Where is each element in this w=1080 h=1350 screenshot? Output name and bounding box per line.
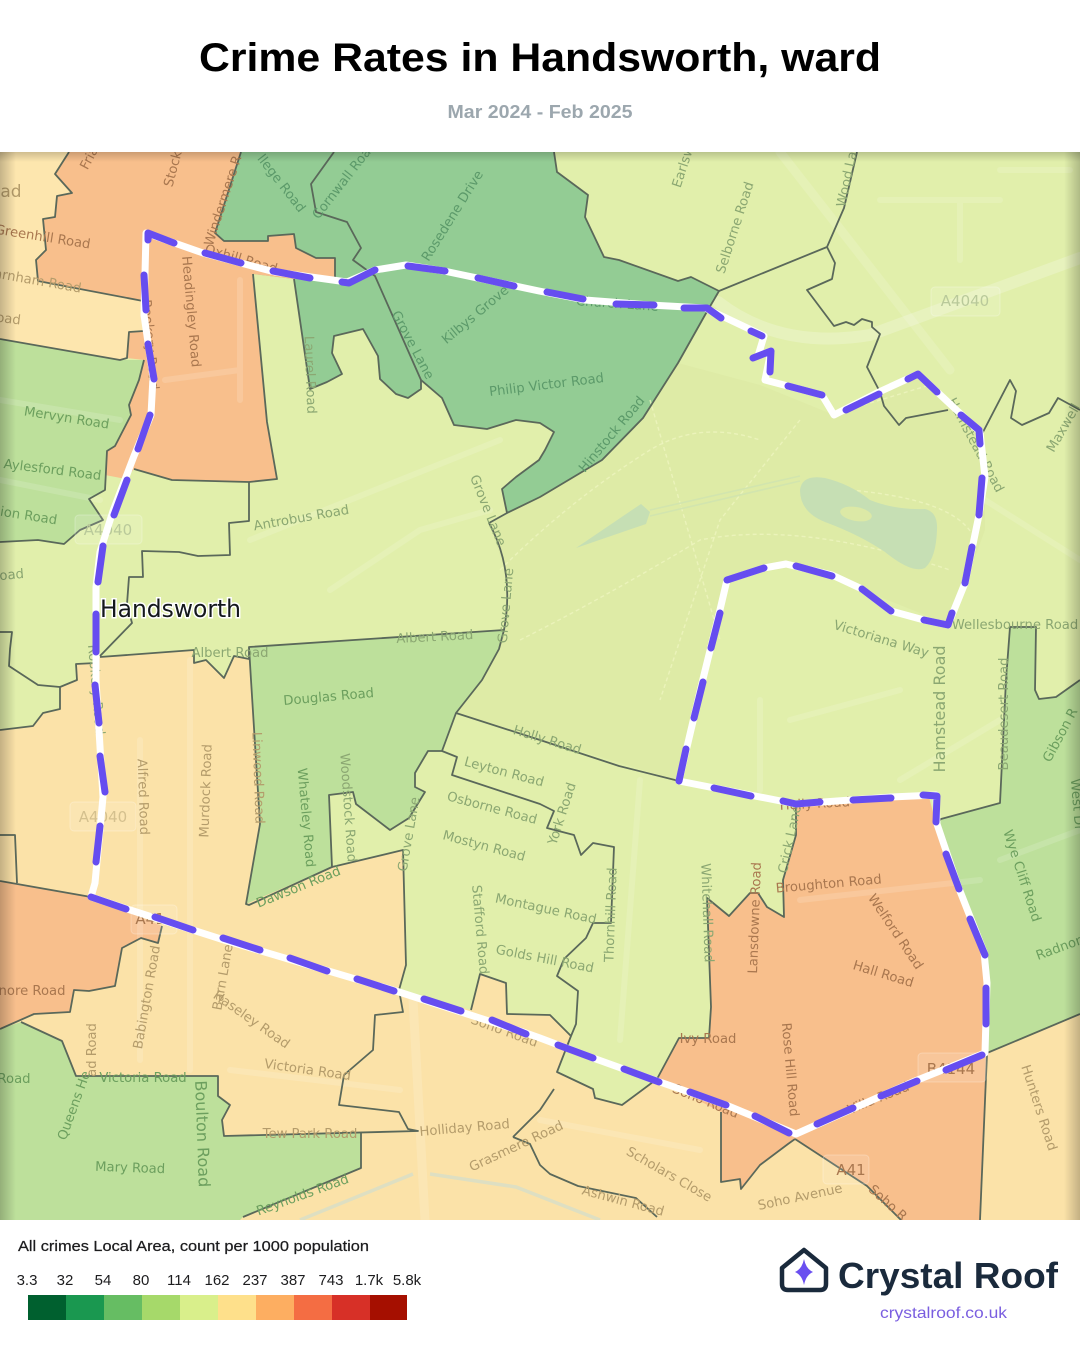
area: orange north-west	[36, 152, 335, 482]
title: Crime Rates in Handsworth, ward	[199, 36, 881, 80]
legend title: All crimes Local Area, count per 1000 population	[18, 1238, 369, 1255]
road labels: Woodstock Road	[336, 753, 359, 863]
road labels: Holly Road	[779, 795, 850, 814]
ward boundary: white line	[91, 233, 987, 1134]
website: crystalroof.co.uk	[880, 1305, 1008, 1322]
road labels: Lansdowne Road	[746, 862, 765, 974]
road labels: llege Road	[254, 152, 308, 216]
road labels: Rookery Road	[84, 644, 107, 735]
road labels: nore Road	[0, 984, 65, 999]
road labels: Rosedene Drive	[419, 168, 487, 264]
road labels: Boulton Road	[191, 1080, 214, 1188]
road labels: A41	[836, 1161, 866, 1179]
road labels: Osborne Road	[445, 789, 539, 828]
icon: house with star	[782, 1250, 826, 1290]
road labels: Douglas Road	[283, 686, 375, 709]
road labels: Leyton Road	[462, 755, 545, 790]
road labels: Victoria Road	[99, 1071, 187, 1086]
small lake	[576, 504, 650, 548]
road labels: Church Lane	[575, 294, 659, 315]
road labels: Wellesbourne Road	[952, 618, 1078, 633]
road labels: Grove Lane	[388, 309, 436, 382]
park area	[456, 363, 985, 781]
road labels: Grove Lane	[396, 796, 423, 873]
map edge vignette	[0, 152, 1080, 1220]
road labels: Soho R	[865, 1182, 910, 1224]
road labels: Selborne Road	[714, 180, 758, 276]
road labels: Tew Park Road	[262, 1127, 357, 1142]
road labels: Rose Hill Road	[778, 1022, 801, 1117]
road labels: Broughton Road	[775, 872, 882, 897]
road labels: Philip Victor Road	[488, 371, 605, 400]
area: medium green south-west	[0, 1022, 361, 1220]
road labels: Kilbys Grove	[439, 283, 512, 348]
road labels: Grove Lane	[466, 473, 508, 548]
map base: low crime areas	[0, 152, 1080, 1104]
road labels: Barn Lane	[210, 943, 237, 1012]
road labels: Laurel Road	[301, 336, 318, 414]
road labels: Wye Cliff Road	[999, 828, 1043, 924]
road labels: Fria	[78, 144, 102, 172]
area: medium green east	[936, 627, 1080, 1053]
legend values: 32	[57, 1272, 73, 1289]
road labels: Dawson Road	[254, 864, 343, 911]
legend values: 1.7k	[355, 1272, 384, 1289]
place label: Handsworth: Handsworth	[100, 595, 241, 623]
road labels: Ivy Road	[680, 1032, 736, 1047]
road labels: Whitehall Road	[697, 863, 716, 963]
road labels: Aylesford Road	[3, 457, 102, 484]
legend values: 80	[133, 1272, 149, 1289]
road labels: Mary Road	[95, 1160, 165, 1177]
area: orange west	[0, 881, 162, 1029]
road labels: Welford Road	[864, 892, 926, 973]
road labels: Mervyn Road	[23, 404, 110, 433]
legend values: 3.3	[17, 1272, 37, 1289]
road labels: ion Road	[0, 505, 58, 528]
road labels: Queens He	[55, 1069, 94, 1142]
legend values: 387	[280, 1272, 306, 1289]
road labels: Headingley Road	[178, 255, 203, 368]
lake	[800, 477, 937, 569]
road labels: Wood La	[834, 150, 861, 208]
road shields	[70, 287, 1000, 1184]
road labels: Hinstock Road	[576, 394, 648, 476]
road labels: A4040	[84, 521, 132, 539]
road labels: Stafford Road	[468, 884, 491, 975]
area: orange south-east	[657, 797, 987, 1220]
legend values: 5.8k	[393, 1272, 422, 1289]
legend values: 162	[204, 1272, 230, 1289]
road labels: Whateley Road	[294, 767, 317, 868]
road labels: York Road	[545, 781, 580, 848]
road labels: Grasmere Road	[467, 1118, 566, 1175]
road labels: Murdock Road	[197, 744, 216, 838]
road labels: Hunters Road	[1017, 1063, 1059, 1153]
boundary lines	[0, 152, 1080, 1220]
road labels: Thornhill Road	[602, 867, 621, 963]
road labels: Alfred Road	[134, 759, 151, 835]
road labels: Crick Lane	[776, 804, 805, 875]
road labels: Victoria Road	[263, 1057, 352, 1084]
logo	[782, 1250, 1059, 1322]
road labels: Victoriana Way	[832, 618, 931, 661]
road labels: Soho Avenue	[757, 1181, 844, 1214]
area: tan top left	[0, 152, 146, 360]
road labels: Montague Road	[494, 892, 598, 928]
road labels: A4040	[79, 808, 127, 826]
road labels: Villa Road	[846, 1080, 912, 1118]
ward boundary: purple dashes	[91, 233, 986, 1133]
road labels: Oxhill Road	[203, 242, 279, 277]
lake island	[840, 506, 872, 522]
road labels: Hamstead Road	[944, 396, 1006, 495]
road labels: Windermere R	[202, 154, 245, 248]
road labels: A4040	[941, 292, 989, 310]
road labels: Earlsw	[670, 144, 698, 190]
road labels: Hall Road	[851, 958, 915, 991]
road labels: Mostyn Road	[441, 828, 527, 865]
road labels: Albert Road	[396, 628, 474, 647]
road labels: Cornwall Roa	[310, 145, 375, 222]
area: medium green left	[0, 339, 144, 544]
area: medium green Douglas Road	[246, 630, 504, 905]
road labels: Haseley Road	[210, 988, 292, 1052]
road labels: Hamstead Road	[930, 645, 949, 773]
road labels: Reynolds Road	[255, 1172, 351, 1219]
road labels: Rookery Road	[138, 299, 161, 390]
legend values: 743	[318, 1272, 344, 1289]
legend values	[17, 1272, 422, 1289]
road labels: Linwood Road	[248, 732, 267, 824]
road labels: Stock	[162, 149, 186, 189]
area: dark green north	[215, 152, 719, 513]
area: tan south	[0, 650, 1080, 1220]
road labels: A41	[135, 910, 165, 928]
legend values: 114	[167, 1272, 191, 1289]
road labels: Babington Road	[131, 944, 164, 1050]
legend colour scale	[28, 1295, 407, 1320]
road labels: Soho Road	[670, 1082, 741, 1122]
road labels: Soho Road	[469, 1013, 540, 1051]
legend	[17, 1238, 422, 1320]
road labels: Scholars Close	[623, 1144, 714, 1206]
road labels: Holly Road	[511, 723, 583, 758]
road labels: Grove Lane	[496, 567, 517, 644]
street network	[0, 152, 1080, 1220]
legend values: 237	[242, 1272, 268, 1289]
road labels: Golds Hill Road	[494, 943, 595, 976]
road labels: Beaudesert Road	[997, 658, 1012, 770]
wordmark: Crystal Roof	[838, 1255, 1059, 1296]
road labels: Albert Road	[191, 646, 269, 661]
road labels: Holliday Road	[419, 1117, 510, 1140]
legend values: 54	[95, 1272, 111, 1289]
road labels: ad Road	[85, 1023, 100, 1077]
road labels: Ashwin Road	[580, 1183, 666, 1220]
road labels: Antrobus Road	[253, 503, 350, 534]
park footpaths	[500, 385, 975, 700]
subtitle: date range: Mar 2024 - Feb 2025	[448, 101, 632, 122]
road labels: B4144	[927, 1060, 975, 1078]
road labels: ad	[0, 182, 22, 202]
